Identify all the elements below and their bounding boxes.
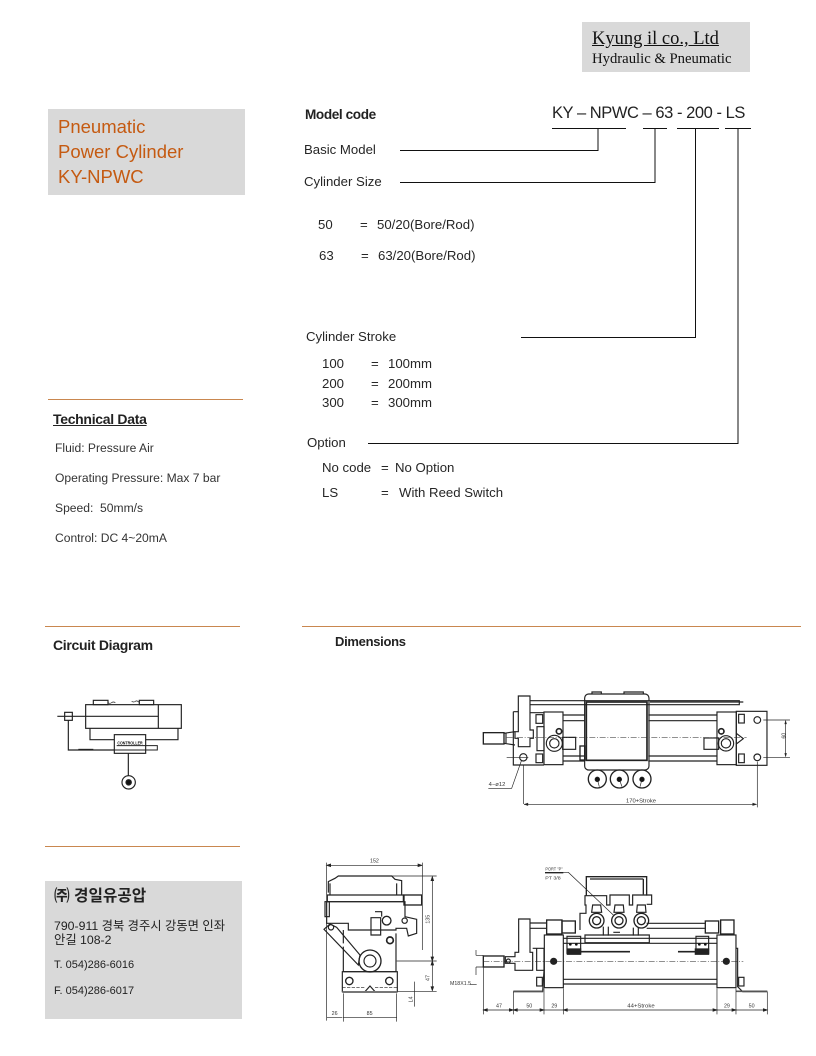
stroke options: 200mm bbox=[388, 376, 432, 390]
front view drawing bbox=[470, 866, 767, 1014]
cylinder size label: Cylinder Size bbox=[304, 174, 382, 189]
option label: Option bbox=[307, 435, 346, 450]
front view drawing: 29 bbox=[551, 1004, 557, 1010]
front view drawing: 47 bbox=[496, 1004, 502, 1010]
front view drawing: 44+Stroke bbox=[627, 1004, 655, 1010]
text: 63/20(Bore/Rod) bbox=[378, 248, 476, 263]
side view drawing: 47 bbox=[425, 975, 431, 981]
address: 790-911 경북 경주시 강동면 인좌 bbox=[54, 919, 225, 933]
LS option bbox=[322, 485, 503, 500]
text: 50/20(Bore/Rod) bbox=[377, 217, 474, 232]
model code leader lines bbox=[368, 128, 751, 444]
product title panel: Pneumatic bbox=[58, 116, 145, 137]
side view drawing: 152 bbox=[370, 859, 379, 865]
front view drawing: PT 3/8 bbox=[545, 876, 561, 881]
bore option 50: 50 bbox=[318, 217, 333, 232]
top view drawing: 170+Stroke bbox=[626, 799, 656, 805]
stroke options: = bbox=[371, 395, 379, 410]
no code option bbox=[322, 460, 454, 475]
side view drawing: 26 bbox=[332, 1011, 338, 1017]
side view drawing: L4 bbox=[408, 996, 414, 1002]
text: = bbox=[381, 485, 389, 500]
side view drawing bbox=[324, 859, 437, 1022]
circuit diagram: CONTROLLER bbox=[117, 740, 143, 745]
text: = bbox=[381, 460, 389, 475]
technical data list: Operating Pressure: Max 7 bar bbox=[55, 471, 220, 485]
basic model label: Basic Model bbox=[304, 142, 376, 157]
stroke options: = bbox=[371, 376, 379, 390]
address bbox=[54, 919, 225, 947]
stroke options bbox=[322, 356, 432, 410]
top view drawing bbox=[483, 692, 790, 807]
side view drawing: 85 bbox=[367, 1011, 373, 1017]
product title panel: KY-NPWC bbox=[58, 166, 144, 187]
cylinder stroke label: Cylinder Stroke bbox=[306, 329, 396, 344]
technical data list: Speed: 50mm/s bbox=[55, 501, 143, 515]
front view drawing: 29 bbox=[724, 1004, 730, 1010]
top view drawing: 60 bbox=[782, 733, 788, 739]
fax: F. 054)286-6017 bbox=[54, 985, 134, 997]
side view drawing: 135 bbox=[425, 915, 431, 924]
technical data list: Fluid: Pressure Air bbox=[55, 441, 154, 455]
bore equals 63: = bbox=[361, 248, 369, 263]
model code heading: Model code bbox=[305, 107, 376, 122]
dimensions heading: Dimensions bbox=[335, 634, 406, 649]
stroke options: 100 bbox=[322, 356, 344, 371]
company header box bbox=[582, 22, 750, 72]
stroke options: 300 bbox=[322, 395, 344, 410]
bore equals 63 bbox=[361, 248, 476, 263]
product title panel bbox=[48, 109, 245, 195]
front view drawing: 50 bbox=[526, 1004, 532, 1010]
bore equals 50 bbox=[360, 217, 474, 232]
no code option: No code bbox=[322, 460, 371, 475]
text: With Reed Switch bbox=[399, 485, 503, 500]
contact panel bbox=[45, 881, 242, 1019]
circuit diagram bbox=[57, 700, 181, 789]
stroke options: = bbox=[371, 356, 379, 371]
model code string: KY – NPWC – 63 - 200 - LS bbox=[552, 104, 745, 122]
bore option 63: 63 bbox=[319, 248, 334, 263]
technical data list: Control: DC 4~20mA bbox=[55, 531, 167, 545]
circuit diagram heading: Circuit Diagram bbox=[53, 637, 153, 653]
text: No Option bbox=[395, 460, 454, 475]
front view drawing: 50 bbox=[749, 1004, 755, 1010]
stroke options: 300mm bbox=[388, 395, 432, 410]
bore equals 50: = bbox=[360, 217, 368, 232]
phone: T. 054)286-6016 bbox=[54, 959, 134, 971]
LS option: LS bbox=[322, 485, 338, 500]
technical data list bbox=[55, 441, 220, 545]
address: 안길 108-2 bbox=[54, 933, 112, 947]
company name: Kyung il co., Ltd bbox=[592, 29, 719, 49]
product title panel: Power Cylinder bbox=[58, 141, 183, 162]
company Korean name: ㈜ 경일유공압 bbox=[54, 888, 146, 905]
stroke options: 200 bbox=[322, 376, 344, 390]
company tagline: Hydraulic & Pneumatic bbox=[592, 51, 732, 67]
stroke options: 100mm bbox=[388, 356, 432, 371]
front view drawing: PORT "P" bbox=[545, 866, 563, 871]
M18 thread label: M18X1.5 bbox=[450, 981, 471, 987]
technical data heading: Technical Data bbox=[53, 411, 147, 427]
top view drawing: 4−ø12 bbox=[489, 782, 505, 788]
